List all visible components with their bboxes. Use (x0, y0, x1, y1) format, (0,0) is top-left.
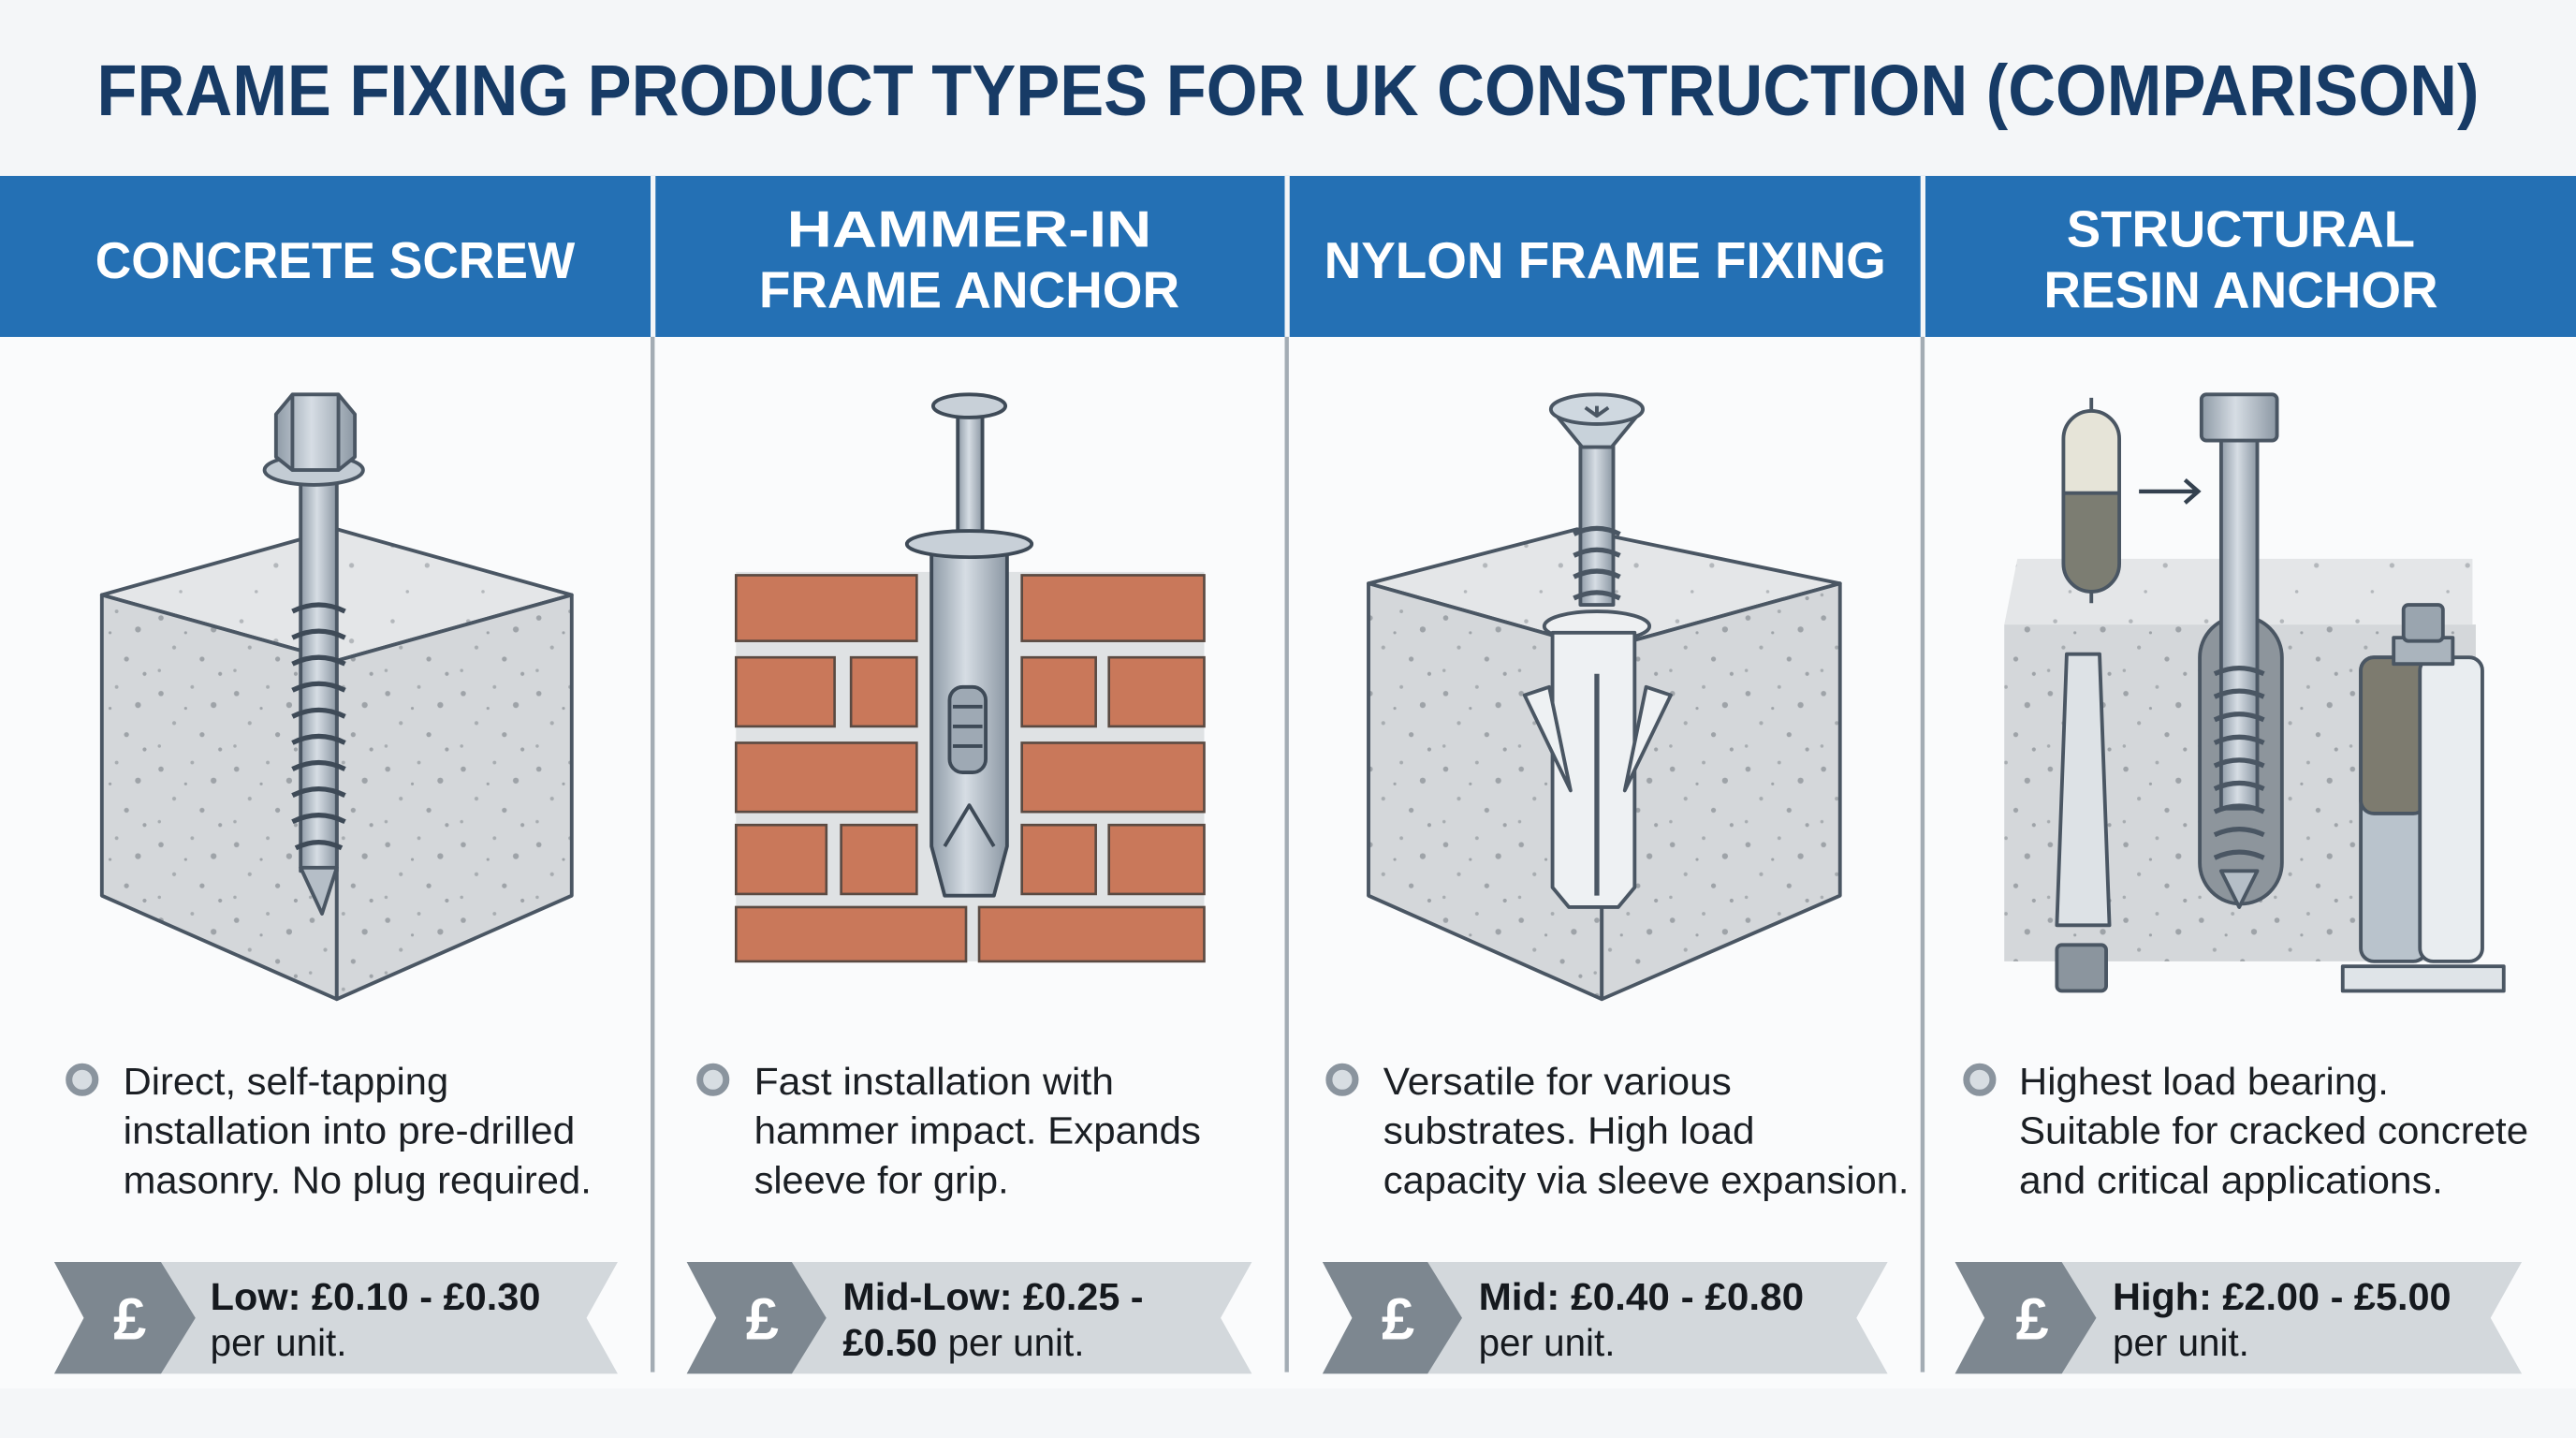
arrow: capsule to rod (2139, 480, 2198, 503)
text block: concrete screw: installation into pre-drilled (124, 1109, 575, 1152)
price banner: high: High: £2.00 - £5.00 (2113, 1275, 2452, 1318)
text block: nylon: capacity via sleeve expansion. (1383, 1158, 1909, 1201)
price banner: high: £ (2015, 1287, 2049, 1353)
price banner: low: per unit. (211, 1321, 346, 1364)
text block: nylon (1329, 1060, 1909, 1201)
price banner: low: Low: £0.10 - £0.30 (211, 1275, 540, 1318)
price banner: mid-low (687, 1262, 1251, 1373)
illustration: hammer-in anchor in brick wall (736, 572, 1204, 961)
text block: concrete screw (69, 1060, 592, 1201)
text block: resin: and critical applications. (2019, 1158, 2443, 1201)
header: hammer-in frame anchor: HAMMER-IN (787, 200, 1151, 257)
text block: hammer-in: Fast installation with (754, 1060, 1114, 1103)
price banner: high: per unit. (2113, 1321, 2249, 1364)
price banner: mid-low: Mid-Low: £0.25 - (842, 1275, 1144, 1318)
price banner: mid: per unit. (1479, 1321, 1615, 1364)
price banner: mid-low: £ (746, 1287, 779, 1353)
illustration: nylon frame fixing in concrete cube (1368, 394, 1840, 999)
text block: concrete screw: masonry. No plug required. (124, 1158, 592, 1201)
header bar (0, 176, 2576, 337)
price banner: mid: £ (1382, 1287, 1414, 1353)
header: structural resin anchor: RESIN ANCHOR (2043, 261, 2438, 318)
header: concrete screw: CONCRETE SCREW (95, 232, 576, 289)
text block: resin: Highest load bearing. (2019, 1060, 2389, 1103)
header: hammer-in frame anchor (759, 200, 1179, 318)
text block: hammer-in: hammer impact. Expands (754, 1109, 1201, 1152)
price banner: mid-low: £0.50 per unit. (842, 1321, 1084, 1364)
header: hammer-in frame anchor: FRAME ANCHOR (759, 261, 1179, 318)
text block: concrete screw: Direct, self-tapping (124, 1060, 448, 1103)
illustration: concrete screw in concrete cube (102, 394, 572, 999)
price banner: mid (1323, 1262, 1888, 1373)
text block: resin: Suitable for cracked concrete (2019, 1109, 2528, 1152)
text block: nylon: Versatile for various (1383, 1060, 1732, 1103)
header: structural resin anchor: STRUCTURAL (2067, 200, 2415, 257)
illustration: structural resin anchor kit (2004, 394, 2504, 990)
price banner: low: £ (113, 1287, 146, 1353)
header: nylon frame fixing: NYLON FRAME FIXING (1325, 232, 1886, 289)
text block: hammer-in (700, 1060, 1201, 1201)
text block: resin (1967, 1060, 2528, 1201)
text block: hammer-in: sleeve for grip. (754, 1158, 1009, 1201)
text block: nylon: substrates. High load (1383, 1109, 1754, 1152)
price banner: low (54, 1262, 618, 1373)
price banner: high (1955, 1262, 2522, 1373)
price banner: mid: Mid: £0.40 - £0.80 (1479, 1275, 1804, 1318)
header: structural resin anchor (2043, 200, 2438, 318)
